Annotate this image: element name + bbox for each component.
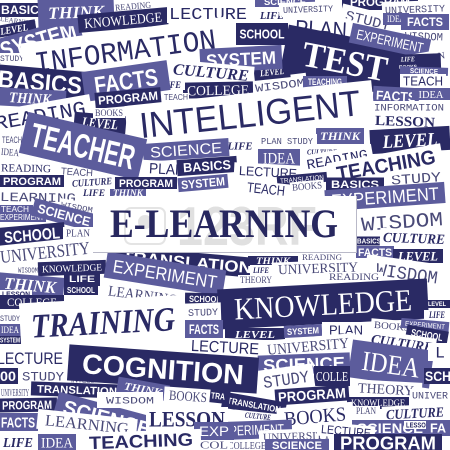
- word: think lower mid: THINK: [123, 381, 163, 399]
- word: reading small: READING: [302, 253, 342, 262]
- word: reading lower: [325, 272, 383, 282]
- word: life and books stack: BOOKS: [399, 64, 418, 71]
- title: e-learning: E-LEARNING: [110, 201, 338, 246]
- word: wisdom lower mid: WISDOM: [106, 396, 154, 408]
- word: teaching: TEACHING: [335, 146, 437, 186]
- word: reading upper: READING: [305, 148, 369, 174]
- word: lesson: LESSON: [375, 114, 435, 131]
- watermark: 123RF: [177, 195, 317, 257]
- word: facts far right: [426, 420, 450, 436]
- word: life middle: LIFE: [226, 142, 253, 152]
- word: science top: [255, 0, 315, 7]
- word: teach right: TEACH: [403, 74, 443, 89]
- word: college lower: [314, 366, 350, 386]
- word: culture small: CULTURE: [72, 176, 113, 190]
- word: experiment bottom: EXP: [199, 423, 229, 439]
- word: school left: SCHOOL: [3, 225, 61, 247]
- word: lecture: LECTURE: [239, 163, 298, 181]
- word: study right of training: STUDY: [188, 308, 218, 320]
- word: study right: STUDY: [391, 170, 442, 190]
- word: translation small: TRANSLATION: [280, 175, 324, 185]
- word: teach: TEACH: [164, 93, 188, 102]
- word: basics small: BASICS: [357, 238, 381, 245]
- word: books lower: BOOKS: [283, 403, 347, 431]
- word: lecture right: [428, 343, 450, 363]
- word: college tiny bottom: [198, 440, 230, 450]
- word: study right of training: [185, 302, 221, 322]
- word: university bottom: UNIVERSITY: [263, 430, 331, 444]
- word: wisdom left: [16, 266, 40, 275]
- word: wisdom middle: [252, 73, 308, 97]
- word: idea: IDEA: [387, 14, 405, 24]
- word: reading lower: READING: [329, 272, 380, 282]
- word: wisdom large: [353, 203, 450, 239]
- word: teacher: TEACHER: [27, 116, 139, 177]
- word: test: [279, 25, 411, 97]
- word: program lower: PROGRAM: [278, 385, 346, 405]
- word: dark block: LIFE: [69, 274, 95, 284]
- word: teaching faded: [303, 76, 347, 88]
- word: knowledge left: KNOWLEDGE: [42, 262, 102, 276]
- word: life and books stack: [399, 53, 441, 79]
- word: culture bottom right: CULTURE: [386, 405, 444, 423]
- word: study left lower: STUDY: [22, 370, 64, 385]
- word: culture lower: CULTURE: [370, 333, 434, 356]
- word: culture: CULTURE: [172, 61, 250, 85]
- word: facts top right: FACTS: [407, 15, 443, 29]
- word: reading left: READING: [1, 162, 51, 175]
- word: culture strip: CULTURE: [245, 410, 271, 422]
- word: experiment right: EXPERIMENT: [330, 184, 440, 211]
- word: translation lower: [221, 392, 287, 418]
- word: experiment top: EXPERIMENT: [355, 26, 425, 56]
- word: school: [236, 23, 288, 45]
- word: university left lower: [0, 386, 31, 399]
- word: translation left: TRANSLATION: [37, 383, 117, 398]
- word: plan small: [411, 48, 450, 67]
- word: reading upper: [300, 144, 374, 175]
- word: basics mid: BASICS: [183, 157, 232, 175]
- word: system lower left: [0, 336, 22, 344]
- word: idea large: IDEA: [360, 346, 422, 385]
- word: plan strip: PLAN: [329, 323, 363, 338]
- word: plan small left: PLAN: [66, 228, 90, 240]
- word: program: PROGRAM: [98, 89, 159, 108]
- word: wisdom: [401, 27, 447, 45]
- word: experiment small: EXPERIMENT: [0, 213, 44, 222]
- word: think left lower: THINK: [3, 274, 58, 297]
- word: basics upper: [326, 178, 384, 191]
- word: facts: FACTS: [93, 64, 160, 100]
- word: level right: LEVEL: [381, 129, 438, 153]
- word: study tilted: STUDY: [343, 9, 392, 35]
- word: teacher: [19, 112, 147, 180]
- word: level small middle: [253, 63, 291, 81]
- word: theory: [350, 379, 422, 400]
- word: school block: 00: [0, 368, 16, 384]
- word: teach mid: TEACH: [1, 205, 29, 214]
- word: basics upper: BASICS: [331, 179, 379, 191]
- word: system small: SYSTEM: [180, 174, 226, 192]
- word: information small: INFORMATION: [374, 104, 444, 114]
- word: science small: [400, 66, 448, 76]
- word: program left lower: PROGRAM: [2, 398, 52, 413]
- word: learning lower: LEARNING: [107, 283, 179, 309]
- word: facts far right: FA: [430, 421, 447, 436]
- word: cognition: COGNITION: [81, 348, 245, 390]
- word: life bottom: [0, 433, 39, 450]
- word: university far right: UNIVER: [412, 392, 448, 402]
- word: level strip: LEVEL: [234, 329, 275, 341]
- word: level small middle: LEVEL: [259, 66, 285, 78]
- word: level strip: [225, 328, 285, 341]
- word: books upper: BOOKS: [292, 180, 323, 194]
- word: books strip: [371, 318, 413, 334]
- word: wisdom small: WISDOM: [60, 201, 94, 216]
- word: science small: SCIENCE: [410, 68, 438, 76]
- word: science bottom right: SCIENCE: [357, 420, 423, 436]
- word: system strip: SYSTEM: [287, 325, 319, 337]
- word: test: TEST: [299, 34, 391, 89]
- word: college left: COLLEGE: [7, 295, 57, 309]
- word: intelligent: INTELLIGENT: [137, 82, 363, 146]
- word: theory small: THEORY: [240, 275, 272, 285]
- word: school: SCHOOL: [240, 27, 285, 42]
- word: university middle: UNIVERSITY: [278, 261, 358, 278]
- word: experiment: EXPERIMENT: [112, 256, 218, 292]
- word: experiment top: [349, 23, 431, 59]
- word: facts middle: FACTS: [358, 247, 392, 259]
- word: think middle: THINK: [320, 129, 361, 143]
- word: think top: [38, 0, 114, 27]
- word: wisdom lower: [364, 254, 450, 292]
- word: college: COLLEGE: [187, 83, 249, 99]
- word: plan study strip: PLAN STUDY: [261, 137, 314, 147]
- word: idea right: IDEA: [418, 89, 444, 101]
- word: life: LIFE: [160, 80, 181, 90]
- word: life and books stack: LIFE: [400, 55, 415, 64]
- word: training: TRAINING: [30, 301, 176, 346]
- word: university top right: [382, 0, 448, 18]
- word: knowledge lower: KNOWLEDGE: [351, 398, 405, 408]
- word: lecture middle lower: LECTURE: [191, 338, 259, 358]
- word: learning bottom: [36, 409, 138, 439]
- word collage: UNIVERSITY: [1, 387, 29, 399]
- word: university lower: UNIVERSITY: [267, 336, 350, 359]
- word: think left: [0, 87, 66, 109]
- word: life top: [254, 8, 290, 22]
- word: lesson large: LESSON: [149, 407, 225, 432]
- word: intelligent small: INTELLIGENT: [71, 377, 116, 384]
- word: teach small left: TEACH: [2, 135, 22, 145]
- word: dark block: [64, 273, 100, 286]
- word: science lower: SCIENCE: [263, 354, 345, 375]
- word: lecture bottom: LECTURE: [320, 422, 371, 440]
- word: think top: THINK: [48, 2, 106, 23]
- word: think lower mid: [116, 377, 170, 401]
- word: science large lower: SCIENCE: [60, 397, 153, 441]
- word: life top: LIFE: [259, 10, 284, 22]
- word: think left: THINK: [9, 90, 52, 108]
- word: translation edge: [209, 388, 231, 404]
- word: information: INFORMATION: [32, 24, 218, 81]
- word: science: SCIENCE: [150, 140, 223, 162]
- word: school small: SCHOOL: [67, 286, 95, 295]
- word: translation: TRANSLATION: [121, 249, 252, 277]
- word: knowledge top: KNOWLEDGE: [84, 11, 163, 32]
- word: think lower: [248, 256, 298, 266]
- word: culture right: CULTURE: [383, 231, 445, 248]
- word: wisdom left: WISDOM: [18, 267, 38, 275]
- word: idea right: [412, 88, 450, 101]
- word: wisdom middle: WISDOM: [255, 78, 306, 96]
- word: facts right: FACTS: [376, 88, 417, 105]
- word: university top: UNIVERSITY: [283, 4, 334, 16]
- word: translation edge: TRA: [211, 390, 226, 402]
- word: program left: PROGRAM: [3, 176, 61, 188]
- word: idea lower left: IDEA: [1, 325, 19, 335]
- word: science: [142, 138, 230, 162]
- word: culture tiny: CULTURE: [307, 148, 337, 156]
- word: system mid: SYSTEM: [206, 47, 276, 71]
- word: lecture top: LECTURE: [169, 6, 247, 25]
- word: wisdom lower mid: [97, 392, 163, 408]
- word: knowledge large: KNOWLEDGE: [233, 282, 413, 326]
- word: level tiny: [424, 300, 450, 308]
- word: books: BOOKS: [95, 108, 123, 118]
- word: level tiny: LEVEL: [428, 302, 446, 308]
- word: information small: [370, 101, 448, 114]
- word: study lower: STUDY: [262, 369, 310, 394]
- word: think small: THINK: [113, 188, 144, 198]
- word: plan strip: [322, 322, 370, 338]
- word: level: LEVEL: [80, 115, 118, 133]
- word: level lower right: LEVEL: [397, 249, 438, 264]
- word: life lower: LIFE: [252, 266, 269, 275]
- word: wisdom small: [58, 198, 96, 216]
- word: experiment tiny: EXPERIMENT: [405, 321, 446, 331]
- word: level small: LEVEL: [0, 22, 29, 38]
- word: level right: [369, 126, 450, 154]
- word: system lower left: SYSTEM: [0, 337, 20, 344]
- word: teach middle: TEACH: [246, 179, 286, 199]
- word: lesson small: LESSON: [2, 291, 30, 298]
- word: learning: [0, 188, 80, 206]
- word: school lower: SCHOOL: [189, 294, 221, 304]
- word: idea left: IDEA: [0, 147, 20, 159]
- word: study right: [384, 166, 448, 190]
- word: teach small left: [0, 135, 24, 145]
- word: university left: UNIVERSITY: [0, 238, 91, 267]
- word: life right: LIFE: [428, 310, 445, 320]
- word: facts bottom left: FACTS: [1, 414, 35, 431]
- word: lecture right: L: [435, 345, 445, 363]
- word: life middle: [224, 139, 256, 153]
- watermark: [125, 195, 317, 257]
- word: study lower left: STUDY: [0, 315, 20, 324]
- word: idea large: [348, 339, 434, 389]
- word: think middle: [316, 128, 364, 144]
- word: translation lower: TRANSLATION: [227, 396, 281, 415]
- word: plan: PLAN: [149, 160, 185, 179]
- word: idea top middle: IDEA: [263, 151, 295, 168]
- word: learning: LEARNING: [0, 190, 76, 206]
- word: theory: THEORY: [358, 381, 414, 399]
- word: facts bottom left: [0, 413, 38, 431]
- word: study left: STUDY: [0, 55, 24, 64]
- word: idea: [383, 13, 409, 25]
- word: learning small: LEARNING: [0, 15, 36, 28]
- word: lesson tiny: LESSON: [406, 422, 430, 429]
- word: facts lower: [185, 320, 223, 338]
- word: books strip: BOOKS: [374, 320, 410, 334]
- word: experiment lower: EXPERIMENT: [216, 421, 285, 439]
- word: think lower: THINK: [256, 256, 291, 266]
- word: university top right: UNIVERSITY: [385, 4, 445, 18]
- word: plan study strip: [257, 134, 317, 148]
- word: college lower: COLLE: [316, 370, 348, 385]
- word: program mid: PROGRAM: [119, 178, 173, 190]
- word: science tilted: SCIENCE: [36, 201, 92, 229]
- word: basics small: BASIC: [1, 3, 39, 17]
- word: life small: LIFE: [82, 188, 105, 198]
- word: wisdom large: WISDOM: [360, 209, 444, 238]
- word: teach behind teacher: TEACH: [61, 166, 93, 180]
- word: experiment bottom: [194, 422, 234, 440]
- word: plan lower: PLAN: [356, 406, 376, 416]
- word: translation: [114, 246, 260, 278]
- word: plan small: PLAN: [418, 50, 446, 66]
- title panel: [93, 196, 357, 253]
- word: learning bottom: LEARNING: [44, 412, 130, 438]
- word: plan top: PLAN: [294, 15, 348, 43]
- word: facts lower: FACTS: [189, 321, 219, 337]
- word: study tilted: [338, 4, 398, 36]
- word: teaching faded: TEACHING: [308, 77, 342, 87]
- word: wisdom lower: WISDOM: [375, 261, 439, 289]
- word: wisdom: WISDOM: [405, 31, 443, 45]
- word: books mid lower: BOOKS: [168, 389, 207, 406]
